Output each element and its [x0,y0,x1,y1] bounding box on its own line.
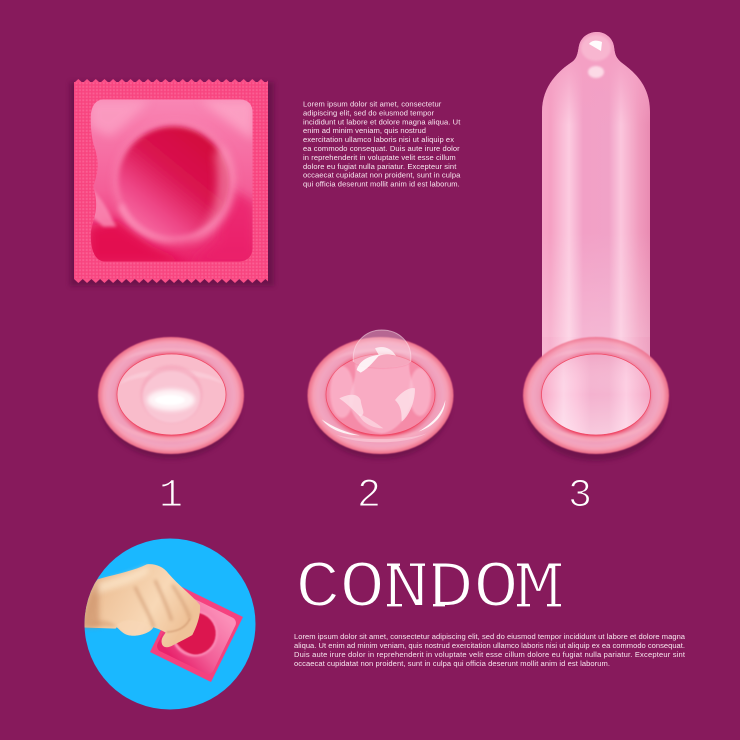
intro text block: qui officia deserunt mollit anim id est laborum. [303,180,460,189]
description text block: Lorem ipsum dolor sit amet, consectetur adipiscing elit, sed do eiusmod tempor incididunt ut labore et dolore magna [294,632,686,641]
description text block: Duis aute irure dolor in reprehenderit in voluptate velit esse cillum dolore eu fugiat nulla pariatur. Excepteur sint [294,650,686,659]
intro text block: occaecat cupidatat non proident, sunt in culpa [303,171,461,180]
packet: wrapped condom [70,79,274,286]
numeral 2: 2 [357,474,381,519]
intro text block: dolore eu fugiat nulla pariatur. Excepteur sint [303,162,457,171]
step 1: rolled condom [98,337,244,459]
intro text block: adipiscing elit, sed do eiusmod tempor [303,108,434,117]
step 2: partly unrolled condom [308,330,454,459]
step 3: unrolled condom [523,28,669,461]
intro text block: ea commodo consequat. Duis aute irure dolor [303,144,460,153]
numeral 1: 1 [159,474,183,519]
description text block: aliqua. Ut enim ad minim veniam, quis nostrud exercitation ullamco laboris nisi ut aliquip ex ea commodo consequat. [294,641,685,650]
intro text block [303,100,461,189]
small packet [150,587,243,682]
numeral 3: 3 [568,474,592,519]
intro text block: incididunt ut labore et dolore magna aliqua. Ut [303,117,461,126]
description text block: occaecat cupidatat non proident, sunt in culpa qui officia deserunt mollit anim id est laborum. [294,659,610,668]
intro text block: exercitation ullamco laboris nisi ut aliquip ex [303,135,454,144]
description text block [294,632,686,668]
intro text block: Lorem ipsum dolor sit amet, consectetur [303,100,442,108]
hand holding packet icon [82,538,256,710]
hand [82,564,200,647]
intro text block: enim ad minim veniam, quis nostrud [303,126,426,135]
intro text block: in reprehenderit in voluptate velit esse cillum [303,153,456,162]
title: CONDOM [295,552,561,626]
condom body [542,32,650,357]
